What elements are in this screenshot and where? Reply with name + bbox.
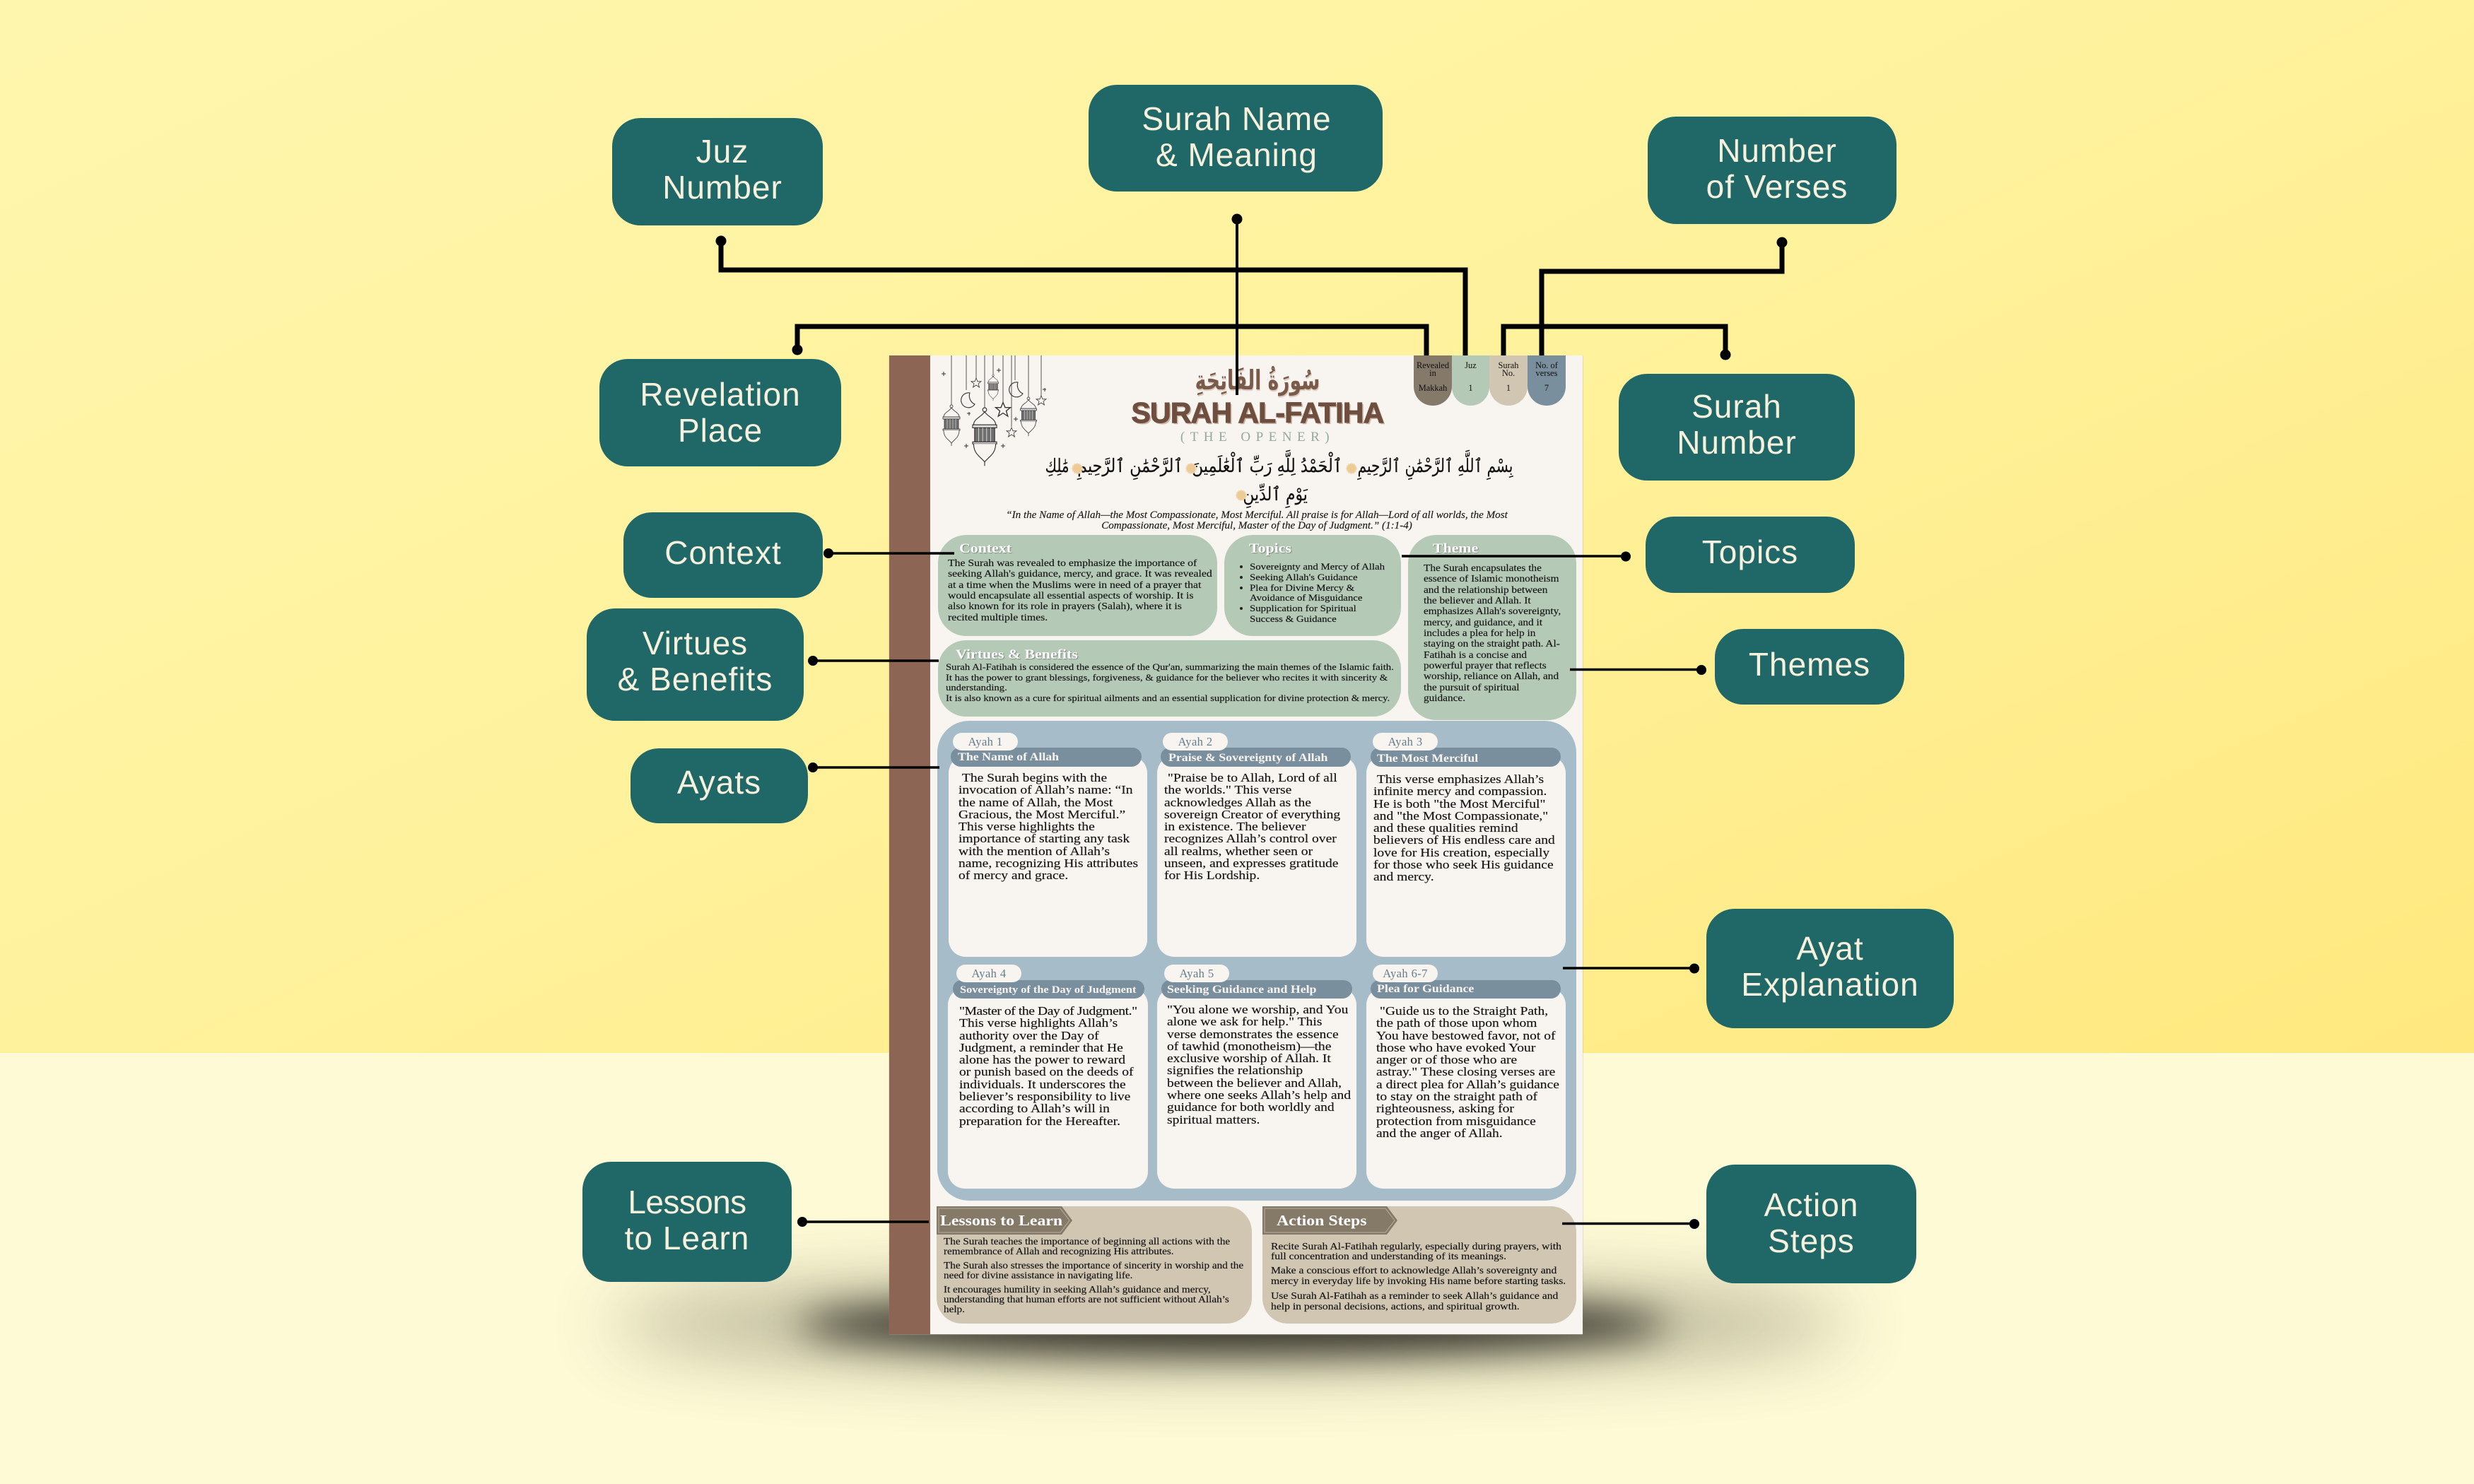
info tab: verses [1528, 355, 1566, 406]
text: according to Allah’s will in [959, 1102, 1110, 1115]
text: importance of starting any task [958, 832, 1130, 845]
connector: topics [1402, 551, 1631, 561]
theme heading: Theme [1433, 541, 1478, 556]
info tab: verses: verses [1536, 367, 1557, 377]
heading: The Most Merciful [1377, 753, 1478, 765]
callout: surah name and meaning [1089, 85, 1383, 192]
text: and mercy. [1373, 870, 1434, 883]
verse 4 end: يَوْمِ ٱلدِّينِ [1243, 484, 1308, 505]
topics list: Success & Guidance [1250, 614, 1337, 624]
callout: ayat explanation [1706, 909, 1954, 1028]
header bar [1161, 980, 1352, 999]
theme text: the pursuit of spiritual [1424, 682, 1519, 693]
pill: Ayah 4 [971, 967, 1007, 980]
virtues text [946, 662, 1394, 703]
callout: surah number [1619, 374, 1855, 481]
text: believers of His endless care and [1373, 833, 1555, 847]
context text: at a time when the Muslims were in need of a prayer that [948, 579, 1201, 590]
callout: virtues and benefits [587, 608, 804, 721]
panel: virtues and benefits [938, 640, 1401, 717]
connector: juz number [715, 236, 1465, 355]
text: name, recognizing His attributes [958, 856, 1138, 870]
text: recognizes Allah’s control over [1164, 832, 1337, 845]
theme text: and the relationship between [1424, 584, 1547, 595]
text: Judgment, a reminder that He [959, 1041, 1123, 1054]
text [958, 1004, 1137, 1128]
poster shadow, core [799, 1297, 1668, 1353]
header bar [953, 980, 1144, 999]
pill: Ayah 2 [1178, 735, 1213, 748]
text: You have bestowed favor, not of [1376, 1029, 1556, 1042]
action text 1 [1271, 1241, 1561, 1262]
theme text: essence of Islamic monotheism [1424, 573, 1559, 584]
text [1373, 772, 1555, 883]
text: love for His creation, especially [1373, 846, 1549, 859]
verse ornaments [1072, 463, 1357, 501]
text: This verse highlights Allah’s [959, 1016, 1118, 1030]
callout: juz number: Number [662, 168, 782, 205]
text: "You alone we worship, and You [1167, 1003, 1348, 1016]
callout: ayat explanation: Explanation [1741, 966, 1919, 1003]
virtues text: understanding. [946, 683, 1007, 693]
callout: juz number [612, 118, 823, 225]
lessons text 3 [944, 1284, 1229, 1314]
callout: juz number: Juz [696, 133, 749, 170]
ribbon heading: Lessons to Learn [940, 1213, 1062, 1229]
text: guidance for both worldly and [1167, 1100, 1335, 1114]
text [1164, 771, 1340, 882]
ayah 1 card [949, 733, 1147, 957]
text: of tawhid (monotheism)—the [1167, 1040, 1331, 1053]
lessons text 2: need for divine assistance in navigating life. [944, 1270, 1132, 1280]
text: exclusive worship of Allah. It [1167, 1052, 1331, 1065]
context text: The Surah was revealed to emphasize the importance of [948, 558, 1197, 568]
hanging lanterns illustration [942, 355, 1047, 466]
panel: lessons to learn [937, 1206, 1252, 1324]
text: alone we ask for help." This [1167, 1015, 1322, 1028]
callout: virtues and benefits: & Benefits [618, 660, 773, 697]
text: the name of Allah, the Most [958, 796, 1113, 809]
translation quote [1006, 510, 1508, 531]
header bar [1371, 748, 1561, 767]
arabic verse text [1045, 449, 1513, 509]
text: the worlds." This verse [1164, 783, 1291, 796]
heading: Plea for Guidance [1377, 983, 1474, 995]
callout: ayats: Ayats [677, 763, 761, 800]
text: authority over the Day of [959, 1029, 1099, 1042]
callout: number of verses [1648, 117, 1896, 224]
header bar [1161, 748, 1351, 767]
topics list: Plea for Divine Mercy & [1250, 583, 1354, 593]
card body [1157, 988, 1356, 1189]
translation quote: Compassionate, Most Merciful, Master of the Day of Judgment.” (1:1-4) [1101, 520, 1412, 531]
ribbon [937, 1206, 1072, 1235]
heading: Seeking Guidance and Help [1167, 984, 1316, 996]
ayah 5 card [1157, 965, 1356, 1189]
info tab: verses: 7 [1544, 383, 1549, 393]
panel: theme [1408, 535, 1576, 720]
context heading: Context [959, 541, 1012, 556]
virtues text: It has the power to grant blessings, forgiveness, & guidance for the believer who recites it with sincerity & [946, 673, 1388, 683]
text: for His Lordship. [1164, 868, 1260, 882]
text: "Master of the Day of Judgment." [959, 1004, 1137, 1018]
callout: topics [1646, 517, 1855, 593]
action text 1: Recite Surah Al-Fatihah regularly, especially during prayers, with [1271, 1241, 1561, 1252]
callout: themes [1715, 629, 1904, 705]
callout: context [623, 512, 823, 598]
virtues text: Surah Al-Fatihah is considered the essence of the Qur'an, summarizing the main themes of the Islamic faith. [946, 662, 1394, 672]
lessons text 1 [944, 1236, 1230, 1256]
text: infinite mercy and compassion. [1373, 784, 1547, 798]
action text 2: mercy in everyday life by invoking His name before starting tasks. [1271, 1276, 1566, 1286]
pill [1373, 733, 1438, 750]
action text 1: full concentration and understanding of its meanings. [1271, 1251, 1506, 1261]
text: of mercy and grace. [958, 868, 1068, 882]
callout: themes: Themes [1749, 646, 1870, 683]
ayah 6-7 card [1366, 965, 1566, 1189]
text: where one seeks Allah’s help and [1167, 1088, 1351, 1102]
context text: seeking Allah's guidance, mercy, and grace. It was revealed [948, 568, 1212, 579]
lessons text 1: remembrance of Allah and recognizing His attributes. [944, 1246, 1174, 1256]
text: sovereign Creator of everything [1164, 808, 1340, 821]
text: a direct plea for Allah’s guidance [1376, 1078, 1559, 1091]
header bar [951, 748, 1142, 767]
text: individuals. It underscores the [959, 1078, 1126, 1091]
lessons text 3: understanding that human efforts are not sufficient without Allah’s [944, 1294, 1229, 1305]
info tab: surah number [1489, 355, 1528, 406]
text: protection from misguidance [1376, 1114, 1536, 1128]
pill [956, 965, 1021, 982]
info tab: revealed: Revealed [1417, 360, 1449, 370]
verse 3: ٱلرَّحْمَٰنِ ٱلرَّحِيمِ [1077, 456, 1183, 477]
topics heading: Topics [1249, 541, 1291, 556]
info tab: revealed [1414, 355, 1452, 406]
connector: themes [1570, 665, 1706, 675]
callout: action steps: Steps [1768, 1223, 1855, 1259]
callout: number of verses: of Verses [1706, 168, 1848, 205]
header bar [1371, 980, 1561, 999]
action text 2: Make a conscious effort to acknowledge Allah’s sovereignty and [1271, 1265, 1556, 1276]
context text [947, 558, 1212, 623]
text: and "the Most Compassionate," [1373, 809, 1548, 823]
text: and the anger of Allah. [1376, 1126, 1503, 1140]
connector: context [823, 548, 954, 558]
action text 3: Use Surah Al-Fatihah as a reminder to seek Allah’s guidance and [1271, 1290, 1558, 1301]
text: He is both "the Most Merciful" [1373, 797, 1545, 811]
text: preparation for the Hereafter. [959, 1114, 1120, 1128]
info tab: verses: No. of [1535, 360, 1558, 370]
action text 3: help in personal decisions, actions, and spiritual growth. [1271, 1301, 1520, 1312]
callout: surah name and meaning: Surah Name [1142, 100, 1332, 137]
context text: recited multiple times. [948, 612, 1048, 623]
pill: Ayah 5 [1179, 967, 1214, 980]
background: pale lower band [0, 1053, 2474, 1484]
context text: also known for its role in prayers (Salah), where it is [948, 601, 1182, 611]
info tab: surah number: 1 [1506, 383, 1511, 393]
connector: virtues [808, 656, 939, 666]
text: to stay on the straight path of [1376, 1090, 1537, 1103]
callout: ayats [631, 748, 808, 823]
background: yellow upper band [0, 0, 2474, 1053]
verse 2: ٱلْحَمْدُ لِلَّهِ رَبِّ ٱلْعَٰلَمِينَ [1192, 456, 1342, 477]
text: for those who seek His guidance [1373, 858, 1554, 871]
topics list: Supplication for Spiritual [1250, 603, 1356, 613]
callout: action steps [1706, 1165, 1916, 1283]
text: anger or of those who are [1376, 1053, 1517, 1066]
callout: context: Context [664, 534, 782, 571]
text: invocation of Allah’s name: “In [958, 783, 1132, 796]
text: alone has the power to reward [959, 1053, 1125, 1066]
info tab: surah number: Surah [1499, 360, 1518, 370]
text: spiritual matters. [1167, 1113, 1260, 1126]
heading: Praise & Sovereignty of Allah [1168, 752, 1327, 764]
callout: revelation place [599, 359, 841, 466]
pill [1163, 733, 1228, 750]
theme text: powerful prayer that reflects [1424, 660, 1547, 671]
action text 3 [1271, 1291, 1558, 1312]
text: righteousness, asking for [1376, 1102, 1514, 1115]
callout: virtues and benefits: Virtues [643, 625, 748, 661]
callout: surah number: Surah [1692, 388, 1782, 425]
ayah 4 card [948, 965, 1148, 1189]
text: The Surah begins with the [962, 771, 1107, 784]
lessons text 1: The Surah teaches the importance of beginning all actions with the [944, 1236, 1230, 1247]
callout: surah name and meaning: & Meaning [1156, 136, 1318, 173]
connector: revelation place [792, 326, 1426, 355]
callout: ayat explanation: Ayat [1796, 930, 1864, 967]
topics list: Avoidance of Misguidance [1250, 593, 1362, 603]
theme text: guidance. [1424, 693, 1465, 703]
panel: context [938, 535, 1217, 636]
subtitle: the opener: (THE OPENER) [1180, 430, 1335, 444]
theme text: the believer and Allah. It [1424, 595, 1531, 606]
poster brown spine [889, 355, 930, 1334]
action text 2 [1271, 1265, 1566, 1286]
info tab: juz [1452, 355, 1489, 406]
connector: lessons [797, 1217, 929, 1227]
theme text [1424, 563, 1561, 704]
text: all realms, whether seen or [1164, 844, 1313, 858]
text [1166, 1003, 1351, 1126]
info tab: juz: 1 [1468, 383, 1473, 393]
text: signifies the relationship [1167, 1064, 1303, 1077]
connector: surah number [1503, 326, 1730, 360]
connector: action steps [1562, 1219, 1699, 1229]
lessons text 3: help. [944, 1304, 965, 1314]
ribbon heading: Action Steps [1277, 1213, 1367, 1229]
theme text: worship, reliance on Allah, and [1424, 671, 1559, 681]
lessons text 2: The Surah also stresses the importance of sincerity in worship and the [944, 1260, 1243, 1271]
ayah 2 card [1157, 733, 1356, 957]
text [958, 771, 1138, 882]
text: those who have evoked Your [1376, 1041, 1535, 1054]
text: "Praise be to Allah, Lord of all [1168, 771, 1337, 784]
text: or punish based on the deeds of [959, 1065, 1133, 1078]
text: verse demonstrates the essence [1167, 1027, 1339, 1041]
theme text: The Surah encapsulates the [1424, 563, 1542, 573]
panel: action steps [1262, 1206, 1576, 1324]
context text: would encapsulate all essential aspects of worship. It is [948, 590, 1194, 601]
title: surah al-fatiha: SURAH AL-FATIHA [1132, 396, 1383, 429]
info tab: revealed: in [1429, 367, 1436, 377]
callout: lessons to learn: Lessons [628, 1183, 746, 1220]
callout: revelation place: Place [678, 412, 763, 449]
connector: ayats [808, 762, 939, 772]
text: astray." These closing verses are [1376, 1065, 1555, 1078]
card body [1157, 756, 1356, 957]
text: and these qualities remind [1373, 821, 1518, 835]
callout: action steps: Action [1764, 1186, 1858, 1223]
lessons text 3: It encourages humility in seeking Allah’s guidance and mercy, [944, 1284, 1211, 1295]
theme text: emphasizes Allah's sovereignty, [1424, 606, 1561, 616]
text [1376, 1004, 1559, 1140]
heading: Sovereignty of the Day of Judgment [960, 984, 1136, 996]
text: in existence. The believer [1164, 820, 1306, 833]
callout: surah number: Number [1677, 424, 1797, 461]
theme text: mercy, and guidance, and it [1424, 617, 1542, 628]
card body [948, 988, 1148, 1189]
verse 4 start: مَٰلِكِ [1045, 456, 1069, 477]
text: Gracious, the Most Merciful.” [958, 808, 1125, 821]
verse 1: بِسْمِ ٱللَّهِ ٱلرَّحْمَٰنِ ٱلرَّحِيمِ [1357, 456, 1513, 477]
topics list: Seeking Allah's Guidance [1250, 572, 1358, 582]
text: This verse emphasizes Allah’s [1377, 772, 1544, 786]
text: unseen, and expresses gratitude [1164, 856, 1338, 870]
topics list [1250, 562, 1385, 624]
card body [1366, 756, 1566, 957]
callout: number of verses: Number [1717, 132, 1837, 169]
poster shadow, wide [608, 1283, 1852, 1364]
virtues text: It is also known as a cure for spiritual ailments and an essential supplication for divine protection & mercy. [946, 693, 1390, 703]
theme text: staying on the straight path. Al- [1424, 638, 1560, 649]
ayah 3 card [1366, 733, 1566, 957]
title: arabic surah name: سُورَةُ الفَاتِحَةِ [1195, 365, 1320, 396]
panel: topics [1224, 535, 1401, 636]
theme text: includes a plea for help in [1424, 628, 1535, 638]
pill: Ayah 6-7 [1383, 967, 1428, 980]
panel: ayat explanations [937, 721, 1576, 1201]
pill: Ayah 3 [1388, 735, 1422, 748]
text: acknowledges Allah as the [1164, 796, 1311, 809]
pill [953, 733, 1018, 750]
pill [1373, 965, 1438, 982]
info tab: revealed: Makkah [1419, 383, 1447, 393]
info tab: juz: Juz [1465, 360, 1477, 370]
connector: ayat explanation [1563, 964, 1699, 974]
text: between the believer and Allah, [1167, 1076, 1342, 1090]
callout: revelation place: Revelation [640, 376, 801, 413]
card body [1366, 988, 1566, 1189]
virtues heading: Virtues & Benefits [956, 647, 1078, 662]
poster [889, 355, 1583, 1334]
connector: surah name [1231, 213, 1243, 395]
text: "Guide us to the Straight Path, [1380, 1004, 1548, 1018]
info tab: surah number: No. [1502, 367, 1515, 377]
pill: Ayah 1 [968, 735, 1002, 748]
connector: number of verses [1542, 237, 1787, 355]
pill [1164, 965, 1229, 982]
text: This verse highlights the [958, 820, 1095, 833]
card body [949, 756, 1147, 957]
heading: The Name of Allah [958, 751, 1059, 763]
callout: lessons to learn: to Learn [625, 1220, 749, 1256]
topics bullets [1240, 565, 1243, 610]
callout: topics: Topics [1702, 534, 1798, 570]
ribbon [1262, 1206, 1397, 1235]
translation quote: “In the Name of Allah—the Most Compassionate, Most Merciful. All praise is for Allah—Lord of all worlds, the Most [1006, 510, 1508, 521]
text: believer’s responsibility to live [959, 1090, 1130, 1103]
text: the path of those upon whom [1376, 1016, 1537, 1030]
topics list: Sovereignty and Mercy of Allah [1250, 562, 1385, 572]
lessons text 2 [944, 1260, 1243, 1280]
theme text: Fatihah is a concise and [1424, 649, 1527, 660]
text: with the mention of Allah’s [958, 844, 1110, 858]
callout: lessons to learn [582, 1162, 792, 1282]
